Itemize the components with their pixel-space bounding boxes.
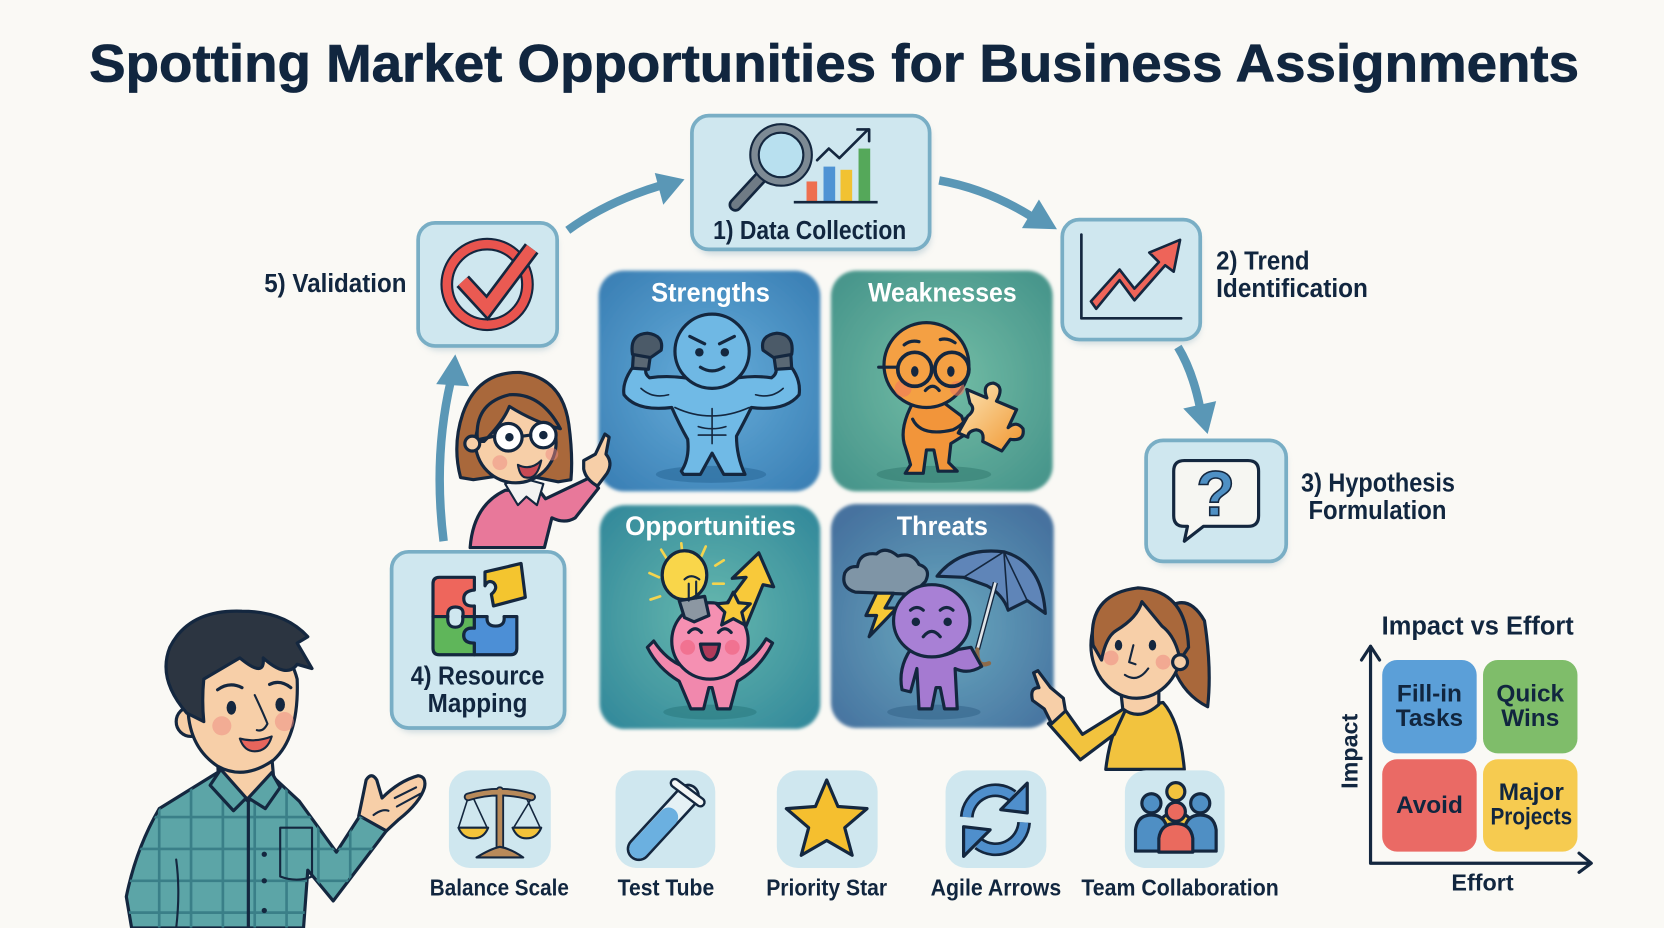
label: 2) Trend Identification: Identification (1216, 275, 1368, 303)
label: Priority Star: Priority Star (766, 875, 887, 901)
panel: Opportunities: Opportunities (625, 511, 796, 541)
character: muscular blue figure (624, 314, 799, 483)
axis label: Effort: Effort (1451, 869, 1514, 895)
label: 3) Hypothesis Formulation: Formulation (1308, 497, 1446, 525)
cell: Fill-in Tasks: Tasks (1396, 705, 1463, 732)
icon: jigsaw puzzle (433, 563, 525, 655)
icon: magnifier and bar chart (735, 128, 878, 205)
card: 1) Data Collection (692, 116, 931, 255)
card: 3) Hypothesis Formulation (1146, 440, 1286, 566)
panel: Weaknesses (831, 271, 1053, 491)
icon tile: Agile Arrows (946, 770, 1046, 868)
cell: Fill-in Tasks: Fill-in (1397, 680, 1462, 707)
icon: question speech bubble: ? (1196, 459, 1235, 530)
panel: Opportunities (600, 505, 820, 729)
cell: Major Projects: Projects (1490, 804, 1572, 831)
panel: Threats (831, 504, 1054, 728)
chart: Impact vs Effort matrix (1336, 613, 1591, 895)
panel: Threats: Threats (897, 511, 988, 541)
icon tile: Team Collaboration (1125, 770, 1225, 868)
card: 2) Trend Identification (1062, 220, 1200, 344)
panel: Strengths (599, 271, 820, 491)
title: Spotting Market Opportunities for Business Assignments (89, 35, 1579, 94)
cell: Quick Wins: Quick (1496, 680, 1565, 707)
icon tile: Balance Scale (449, 770, 551, 868)
icon: red check in circle (447, 244, 532, 325)
cell: Avoid (1382, 759, 1477, 852)
arrow: trend to hypothesis (1178, 347, 1216, 434)
panel: Weaknesses: Weaknesses (868, 277, 1017, 307)
matrix title: Impact vs Effort (1382, 613, 1574, 641)
card: 4) Resource Mapping: Mapping (428, 690, 527, 718)
character: woman with glasses pointing (457, 372, 610, 548)
icon tile: Test Tube (616, 770, 715, 868)
character: man in plaid shirt presenting (106, 611, 425, 928)
character: woman with ponytail pointing (1032, 588, 1209, 769)
card: 4) Resource Mapping (392, 552, 565, 732)
card: 1) Data Collection: 1) Data Collection (713, 217, 906, 245)
character: worried orange figure with puzzle piece (877, 323, 1023, 483)
cell: Fill-in Tasks (1382, 660, 1477, 753)
icon tile: Priority Star (777, 770, 878, 868)
character: happy pink figure with bulb and arrow (647, 543, 774, 719)
label: Agile Arrows: Agile Arrows (931, 875, 1061, 901)
card: 4) Resource Mapping: 4) Resource (411, 662, 544, 690)
cell: Major Projects (1483, 759, 1577, 852)
label: 3) Hypothesis Formulation (1301, 469, 1455, 525)
card: 5) Validation (418, 223, 557, 350)
icon: question speech bubble (1174, 459, 1259, 541)
cell: Major Projects: Major (1499, 779, 1564, 806)
arrow: resource mapping to validation (436, 354, 469, 541)
axis label: Impact: Impact (1336, 713, 1362, 789)
character: sad purple figure with storm cloud and umbrella (844, 550, 1045, 719)
arrow: validation to data collection (568, 173, 684, 230)
cell: Avoid: Avoid (1396, 792, 1463, 819)
label: Team Collaboration: Team Collaboration (1081, 875, 1279, 901)
label: 2) Trend Identification (1216, 248, 1368, 303)
arrow: data collection to trend (939, 180, 1057, 229)
cell: Quick Wins: Wins (1501, 705, 1559, 732)
panel: Strengths: Strengths (651, 277, 770, 307)
icon: rising trend chart (1081, 235, 1181, 318)
axes (1362, 646, 1591, 872)
label: 2) Trend Identification: 2) Trend (1216, 248, 1310, 276)
label: 3) Hypothesis Formulation: 3) Hypothesis (1301, 469, 1455, 497)
cell: Quick Wins (1483, 660, 1577, 753)
label: Test Tube: Test Tube (618, 875, 714, 901)
label: 5) Validation: 5) Validation (264, 270, 406, 298)
label: Balance Scale: Balance Scale (430, 875, 569, 901)
